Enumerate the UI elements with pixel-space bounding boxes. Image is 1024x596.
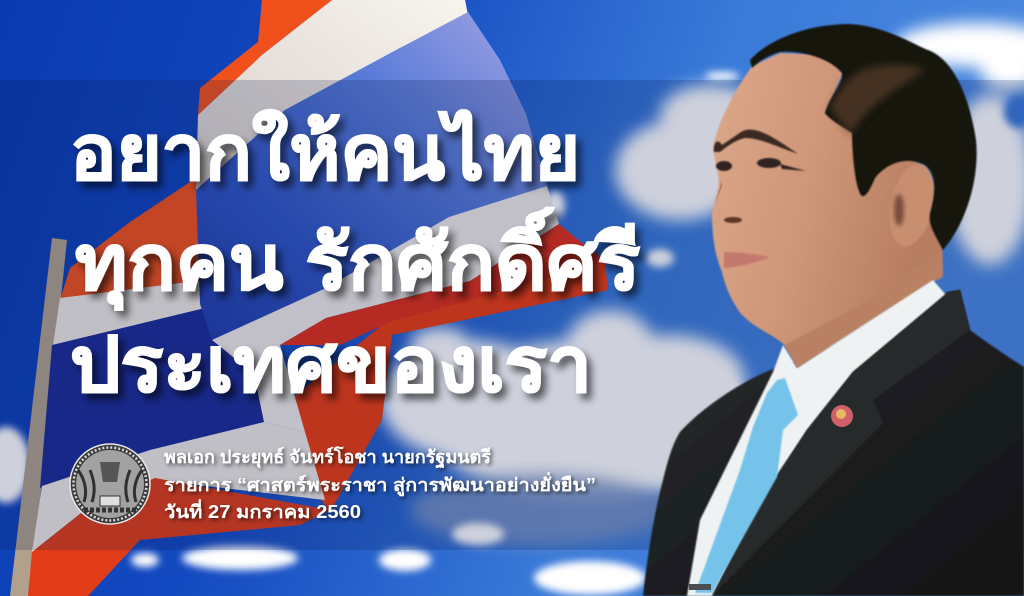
headline line 2: ทุกคน รักศักดิ์ศรี: [75, 207, 640, 311]
caption text: [164, 446, 596, 522]
hair: [750, 24, 977, 250]
neck: [727, 200, 943, 368]
caption line 3: วันที่ 27 มกราคม 2560: [164, 499, 361, 522]
lapel: [712, 290, 970, 596]
government seal: [70, 444, 150, 524]
caption line 2: รายการ “ศาสตร์พระราชา สู่การพัฒนาอย่างยั่งยืน”: [164, 472, 596, 497]
flag lower white stripe: [32, 422, 325, 552]
headline line 3: ประเทศของเรา: [70, 323, 592, 408]
eyes: [716, 158, 806, 171]
flag main blue stripe: [196, 12, 547, 340]
flag top white stripe: [196, 0, 468, 190]
mouth: [724, 252, 770, 268]
flag lower left blue stripe: [40, 308, 264, 488]
flag top red stripe: [198, 0, 332, 115]
flag red mid stripe: [280, 224, 608, 345]
nose shading: [715, 180, 742, 223]
portrait of man in suit: [643, 24, 1024, 596]
suit jacket: [643, 290, 1024, 596]
flag middle white stripe: [212, 186, 559, 432]
tie clip: [689, 584, 711, 590]
shirt and collar: [687, 280, 946, 596]
dark translucent band: [0, 80, 1024, 550]
blue gap in cloud: [1004, 96, 1024, 128]
lower cloud shade: [410, 475, 670, 545]
headline line 1: อยากให้คนไทย: [70, 109, 580, 196]
Thai flag: [10, 0, 608, 596]
face: [712, 53, 942, 345]
caption line 1: พลเอก ประยุทธ์ จันทร์โอชา นายกรัฐมนตรี: [164, 446, 491, 469]
flag lower left white stripe: [52, 280, 205, 352]
ear: [883, 160, 941, 250]
eyebrows: [714, 130, 798, 154]
hairline shading: [830, 65, 925, 135]
flag pole: [10, 238, 67, 596]
main headline: [70, 109, 640, 408]
tie: [695, 378, 798, 593]
flag red tail and fold: [290, 262, 608, 512]
flag lower left red top stripe: [60, 178, 205, 300]
lapel pin: [831, 405, 853, 427]
flag bottom red stripe: [28, 478, 330, 596]
